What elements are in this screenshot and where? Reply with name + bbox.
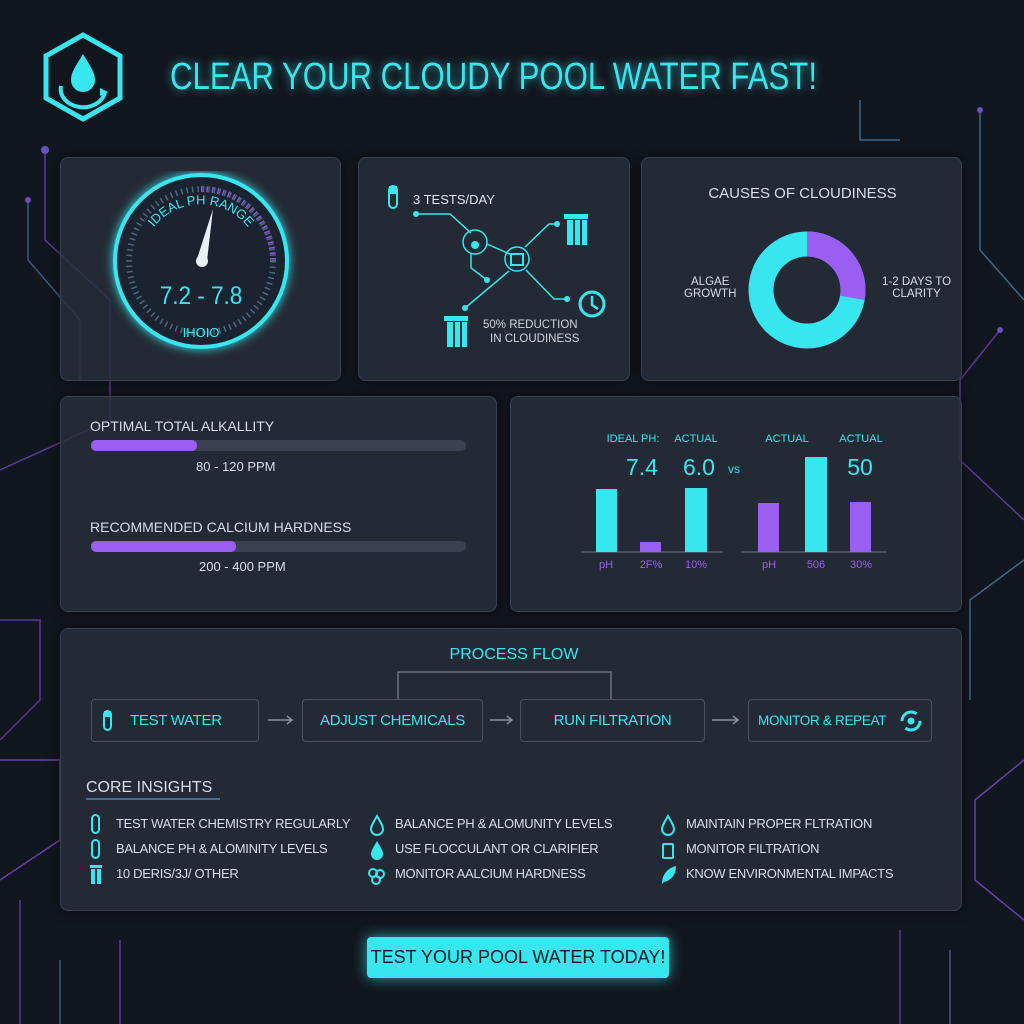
panel: bar chart: 506 [807,559,825,571]
gauge: 7.2 - 7.8 [160,282,242,310]
panel: pH gauge [60,157,341,381]
panel: bar chart: ACTUAL [839,433,883,445]
panel: bar chart: 50 [847,454,873,480]
panel: alkalinity and hardness: RECOMMENDED CALCIUM HARDNESS [90,519,351,535]
icon: repeat [900,710,922,732]
step: monitor & repeat: MONITOR & REPEAT [758,713,886,728]
panel: alkalinity and hardness: 80 - 120 PPM [196,459,276,474]
process flow heading: PROCESS FLOW [450,646,578,663]
network diagram: 3 TESTS/DAY [413,192,495,207]
panel: process flow and core insights [60,628,962,911]
icon: test tube [103,710,112,731]
insights list: BALANCE PH & ALOMUNITY LEVELS [395,816,612,831]
flow connectors [268,671,739,724]
icon: logo hexagon water drop [44,32,122,122]
panel: bar chart: vs [728,462,740,476]
insights list: 10 DERIS/3J/ OTHER [116,866,238,881]
panel: bar chart: ACTUAL [765,433,809,445]
insights list: MAINTAIN PROPER FLTRATION [686,816,872,831]
step: run filtration [520,699,705,742]
donut chart [748,232,866,348]
insights list: KNOW ENVIRONMENTAL IMPACTS [686,866,893,881]
panel: alkalinity and hardness: 200 - 400 PPM [199,559,286,574]
insights list [90,814,893,885]
core insights heading: CORE INSIGHTS [86,779,212,796]
panel: bar chart: pH [599,559,613,571]
insights list: TEST WATER CHEMISTRY REGULARLY [116,816,350,831]
gauge [105,171,297,357]
panel: causes donut: ALGAE [691,276,729,288]
panel: bar chart: 6.0 [683,454,715,480]
panel: causes donut: CLARITY [892,288,941,300]
panel: causes donut: CAUSES OF CLOUDINESS [708,185,897,202]
panel: bar chart [510,396,962,612]
step: adjust chemicals [302,699,483,742]
network diagram: 50% REDUCTION [483,319,578,331]
insights list: USE FLOCCULANT OR CLARIFIER [395,841,598,856]
step: run filtration: RUN FILTRATION [554,712,671,729]
panel: causes donut: GROWTH [684,288,736,300]
insights list: MONITOR FILTRATION [686,841,819,856]
panel: testing network [358,157,630,381]
network diagram [388,185,606,347]
button: call to action: TEST YOUR POOL WATER TODAY! [371,947,665,967]
panel: causes donut: 1-2 DAYS TO [882,276,951,288]
button: call to action [367,937,669,978]
panel: bar chart: ACTUAL [674,433,718,445]
step: test water [91,699,259,742]
panel: bar chart: 2F% [640,559,663,571]
panel: alkalinity and hardness: OPTIMAL TOTAL ALKALLITY [90,418,274,434]
insights list: MONITOR AALCIUM HARDNESS [395,866,585,881]
panel: bar chart: pH [762,559,776,571]
gauge: IHOIO [183,325,219,340]
panel: bar chart: IDEAL PH: [607,433,659,445]
insights list: BALANCE PH & ALOMINITY LEVELS [116,841,327,856]
panel: bar chart: 10% [685,559,707,571]
panel: causes donut [641,157,962,381]
panel: alkalinity and hardness [60,396,497,612]
panel: bar chart: 7.4 [626,454,658,480]
gauge: IDEAL PH RANGE [148,195,254,227]
step: adjust chemicals: ADJUST CHEMICALS [320,712,465,729]
panel: bar chart: 30% [850,559,872,571]
network diagram: IN CLOUDINESS [490,333,580,345]
title: CLEAR YOUR CLOUDY POOL WATER FAST! [170,56,817,98]
step: monitor & repeat [748,699,932,742]
step: test water: TEST WATER [130,712,222,729]
